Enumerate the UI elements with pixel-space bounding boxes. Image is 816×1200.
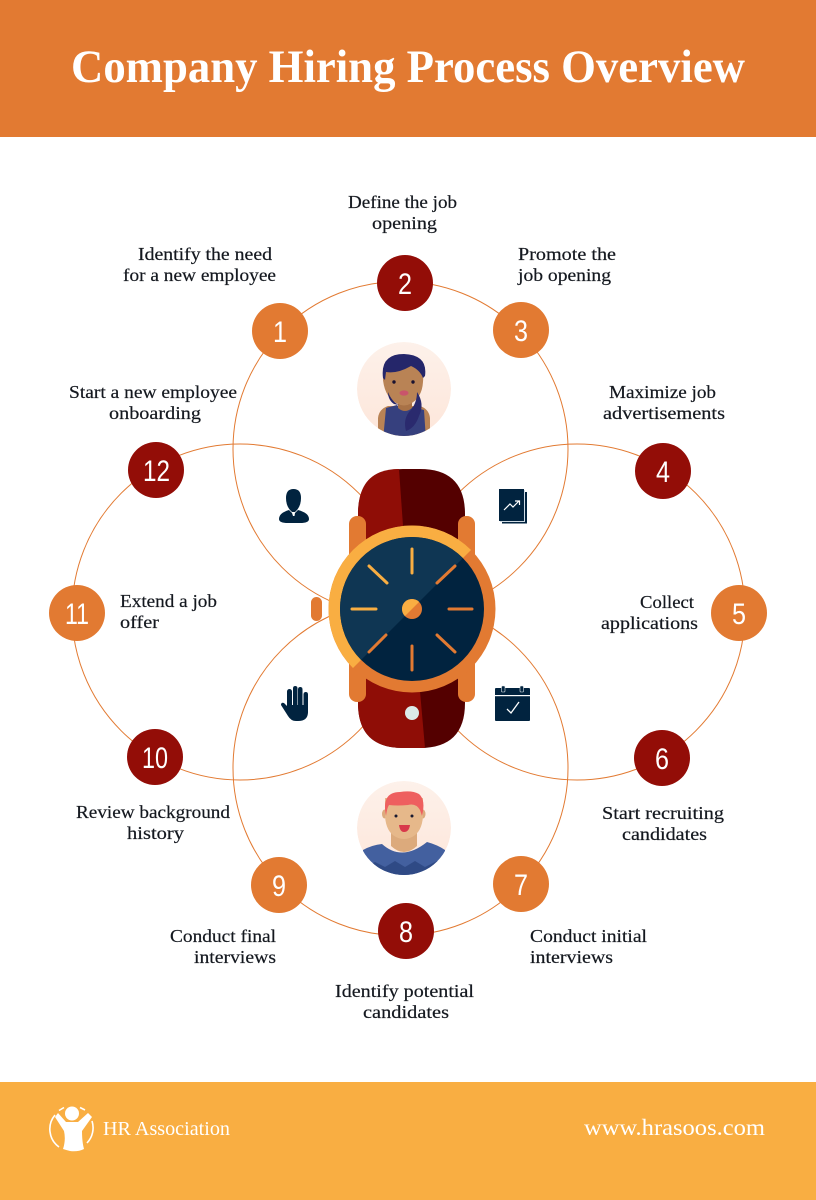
label: step 6: Start recruiting — [602, 803, 724, 823]
label: step 3 — [517, 244, 616, 285]
step badge 3 — [493, 302, 549, 358]
label: step 11 — [120, 591, 217, 632]
step badge 1: 1 — [273, 316, 287, 349]
label: step 10: history — [127, 823, 184, 843]
label: step 7: interviews — [530, 947, 613, 967]
step badge 10 — [127, 729, 183, 785]
step badge 11: 11 — [65, 598, 89, 631]
label: step 10: Review background — [76, 802, 230, 822]
label: step 1: for a new employee — [123, 265, 276, 285]
crown — [311, 597, 322, 621]
step badge 1 — [252, 303, 308, 359]
label: step 8: Identify potential — [335, 981, 474, 1001]
label: step 11: offer — [120, 612, 159, 632]
watch — [311, 469, 496, 748]
avatar: man — [357, 781, 451, 880]
label: step 4: advertisements — [603, 403, 725, 423]
label: step 11: Extend a job — [120, 591, 217, 611]
watch lugs — [349, 516, 475, 702]
label: step 3: job opening — [517, 265, 611, 285]
step badge 11 — [49, 585, 105, 641]
step badge 10: 10 — [142, 742, 168, 775]
icon: HR Association logo — [50, 1106, 93, 1151]
watch strap — [358, 469, 465, 748]
step badge 8: 8 — [399, 916, 413, 949]
step badge 4: 4 — [656, 456, 670, 489]
label: step 9: Conduct final — [170, 926, 276, 946]
step badge 4 — [635, 443, 691, 499]
step badge 9 — [251, 857, 307, 913]
organisation name: HR Association — [103, 1118, 230, 1140]
footer banner — [0, 1082, 816, 1200]
label: step 4: Maximize job — [609, 382, 716, 402]
four overlapping process circles — [72, 282, 745, 936]
title: Company Hiring Process Overview — [71, 41, 745, 93]
label: step 5: Collect — [640, 592, 694, 612]
step badge 7 — [493, 856, 549, 912]
label: step 6: candidates — [622, 824, 707, 844]
label: step 1: Identify the need — [138, 244, 272, 264]
strap hole — [405, 706, 419, 720]
label: step 12 — [69, 382, 237, 423]
watch ticks — [352, 549, 472, 670]
label: step 5 — [601, 592, 698, 633]
avatar: woman — [357, 342, 451, 440]
step badge 5 — [711, 585, 767, 641]
step badge 2: 2 — [398, 268, 412, 301]
step badge 12 — [128, 442, 184, 498]
header banner — [0, 0, 816, 137]
label: step 2 — [348, 192, 457, 233]
step badge 5: 5 — [732, 598, 746, 631]
label: step 8 — [335, 981, 474, 1022]
label: step 7: Conduct initial — [530, 926, 647, 946]
icon: employee — [279, 489, 309, 523]
label: step 3: Promote the — [518, 244, 616, 264]
icon: chart document — [499, 489, 527, 524]
step badge 6: 6 — [655, 743, 669, 776]
step badge 12: 12 — [143, 455, 170, 488]
label: step 6 — [602, 803, 724, 844]
icon: calendar — [495, 686, 530, 721]
step badge 7: 7 — [514, 869, 528, 902]
icon: raised hand — [281, 686, 308, 721]
step badge 6 — [634, 730, 690, 786]
label: step 1 — [123, 244, 276, 285]
watch dial — [340, 537, 484, 681]
step badge 9: 9 — [272, 870, 286, 903]
watch bezel — [328, 526, 496, 692]
step badge 2 — [377, 255, 433, 311]
label: step 2: opening — [372, 213, 437, 233]
label: step 7 — [530, 926, 647, 967]
step badge 8 — [378, 903, 434, 959]
label: step 12: Start a new employee — [69, 382, 237, 402]
label: step 2: Define the job — [348, 192, 457, 212]
watch center pin — [402, 599, 422, 619]
label: step 5: applications — [601, 613, 698, 633]
label: step 8: candidates — [363, 1002, 449, 1022]
website: www.hrasoos.com — [584, 1115, 765, 1140]
label: step 10 — [76, 802, 230, 843]
step badge 3: 3 — [514, 315, 528, 348]
label: step 9: interviews — [194, 947, 276, 967]
label: step 12: onboarding — [109, 403, 201, 423]
label: step 4 — [603, 382, 725, 423]
label: step 9 — [170, 926, 276, 967]
